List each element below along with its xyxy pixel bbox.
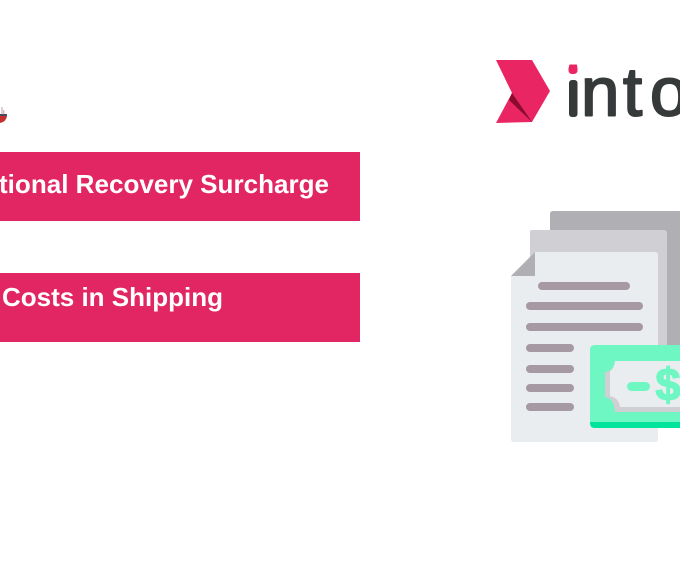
folded corner — [511, 252, 535, 276]
logo: into — [496, 54, 680, 130]
money note — [590, 345, 680, 428]
icon: documents with money note — [511, 211, 680, 442]
banner: Costs in Shipping: Costs in Shipping — [2, 282, 223, 312]
front sheet — [511, 252, 658, 442]
back sheet — [550, 211, 680, 380]
money note: $ — [655, 359, 680, 410]
banner: Costs in Shipping — [0, 273, 360, 342]
text lines — [526, 282, 643, 411]
banner: Operational Recovery Surcharge: tional Recovery Surcharge — [0, 169, 329, 199]
logo chevron mark — [496, 60, 550, 123]
icon: ship — [0, 107, 7, 123]
middle sheet — [530, 230, 667, 400]
banner: Operational Recovery Surcharge — [0, 152, 360, 221]
